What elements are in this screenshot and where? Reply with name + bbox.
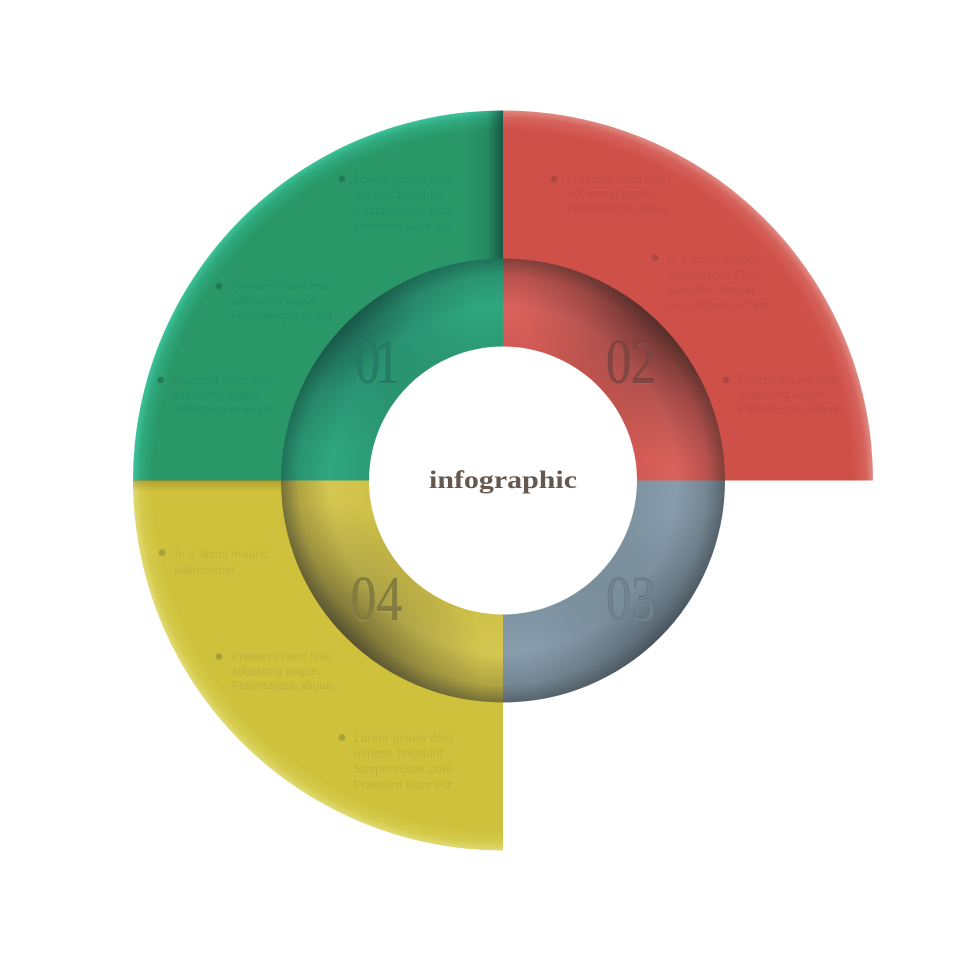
ring segment: gray xyxy=(503,480,725,703)
red text block 2: convallis. Integer xyxy=(667,285,755,297)
ring segment: green xyxy=(281,258,503,481)
yellow text block 2 xyxy=(216,652,333,692)
number 03: 03 xyxy=(606,565,655,634)
yellow text block 3: Praesent vitae est xyxy=(354,780,452,792)
red text block 2: In a lacus mauris. xyxy=(667,254,765,266)
red text block 1: Praesent nunc felis xyxy=(566,174,666,186)
red text block 1 xyxy=(551,174,668,215)
center white circle xyxy=(369,346,637,614)
green text block 1 xyxy=(339,174,453,233)
yellow text block 3: Lorem ipsum dolo xyxy=(354,733,453,745)
red text block 3 xyxy=(723,375,840,416)
panel: green outer wedge xyxy=(133,110,503,480)
yellow text block 3: Suspendisse pote xyxy=(354,764,452,776)
panel: yellow outer wedge xyxy=(133,480,503,850)
panel: red outer wedge xyxy=(503,110,873,480)
red text block 2 xyxy=(652,254,769,312)
green text block 3: adipiscing augue, xyxy=(172,390,262,402)
red text block 2: ullamcorper. Phas xyxy=(667,270,761,282)
green text block 2: Pellentesque aliqua xyxy=(231,310,333,322)
yellow text block 1 xyxy=(159,549,272,577)
green text block 3: Praesent nunc felis xyxy=(172,375,271,387)
yellow text block 1: In a lacus mauris. xyxy=(174,549,272,561)
number 01: 01 xyxy=(355,328,398,398)
green text block 3 xyxy=(157,375,274,416)
red text block 3: Praesent nunc felis xyxy=(738,375,837,387)
yellow text block 2: Pellentesque aliqua xyxy=(232,680,333,692)
ring segment: yellow xyxy=(281,480,503,703)
red text block 1: adipiscing augue, xyxy=(566,188,656,200)
green text block 1: ultrices tincidunt xyxy=(354,190,444,202)
red text block 2: nec, dictum sed arc xyxy=(667,300,769,312)
green text block 2: adipiscing augue, xyxy=(231,296,320,308)
yellow text block 2: Praesent nunc felis xyxy=(232,652,331,664)
number 04: 04 xyxy=(350,566,402,635)
ring segment: red xyxy=(503,258,725,481)
red text block 3: adipiscing augue, xyxy=(738,390,827,402)
green text block 1: Suspendisse pote xyxy=(354,206,453,218)
green text block 1: Praesent vitae est xyxy=(354,221,452,233)
number 04: 04 xyxy=(350,565,402,634)
number 03: 03 xyxy=(606,565,655,635)
yellow text block 3 xyxy=(339,733,453,792)
green text block 1: Lorem ipsum dolo xyxy=(354,174,453,186)
yellow text block 1: ullamcorper. xyxy=(174,565,238,577)
number 02: 02 xyxy=(606,328,655,398)
red text block 1: Pellentesque aliqua xyxy=(566,203,668,215)
yellow text block 2: adipiscing augue, xyxy=(232,666,321,678)
green text block 3: Pellentesque aliqua xyxy=(172,404,274,416)
yellow text block 3: ultrices tincidunt xyxy=(354,748,444,760)
number 01: 01 xyxy=(355,328,398,397)
red text block 3: Pellentesque aliqua xyxy=(738,404,840,416)
title: infographic xyxy=(429,467,577,494)
green text block 2 xyxy=(216,281,333,322)
number 02: 02 xyxy=(606,328,655,397)
green text block 2: Praesent nunc felis xyxy=(231,281,330,293)
